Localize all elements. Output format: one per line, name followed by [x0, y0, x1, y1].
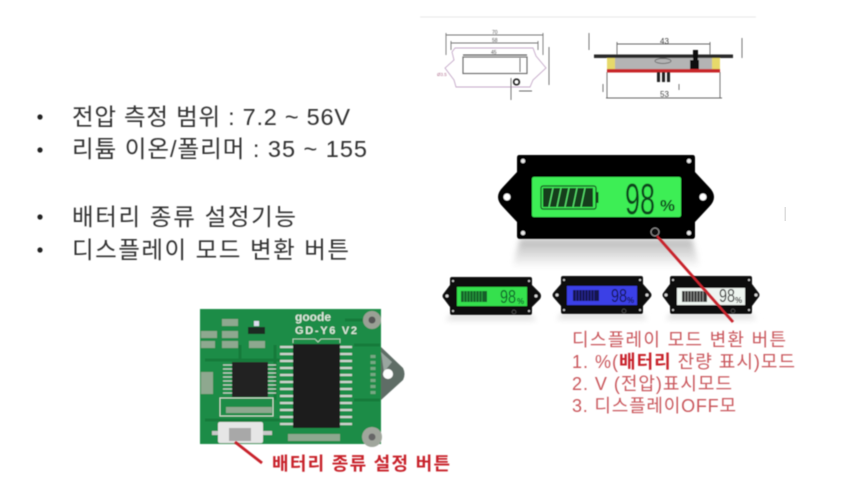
callout: display mode description	[572, 330, 795, 416]
small display: blue	[552, 276, 652, 321]
battery icon	[541, 186, 598, 209]
small display: green: %	[517, 297, 524, 306]
metal tab	[381, 347, 404, 400]
small chip	[223, 362, 276, 397]
small display: white: %	[735, 296, 742, 305]
bullet item: battery type setting: 배터리 종류 설정기능	[72, 204, 296, 230]
circuit board photo	[200, 309, 404, 447]
display reflection	[512, 239, 700, 268]
screws	[363, 311, 381, 329]
green LCD	[532, 177, 681, 217]
arrow: setting button line	[235, 442, 262, 463]
dimension drawings	[420, 17, 756, 100]
mode button	[651, 228, 659, 236]
small display: white: 98	[719, 286, 735, 306]
mode 3: 3. 디스플레이OFF모	[572, 396, 736, 416]
bullet item: display mode button: 디스플레이 모드 변환 버튼	[72, 237, 349, 263]
drawing: side view: 43	[660, 37, 669, 46]
label: battery type setting button: 배터리 종류 설정 버튼	[272, 454, 450, 474]
bullet item: voltage range: 전압 측정 범위 : 7.2 ~ 56V	[72, 104, 350, 130]
small display: blue: %	[627, 296, 634, 305]
mode 1: 1. %(배터리 잔량 표시)모드	[572, 352, 795, 372]
PCB labels: goode	[295, 310, 331, 324]
drawing: front view: 45	[491, 50, 497, 56]
main battery display	[498, 155, 714, 268]
drawing: front view: 58	[492, 38, 498, 44]
drawing: side view: 53	[660, 90, 669, 99]
arrow: display mode button line	[657, 236, 733, 322]
small components	[201, 319, 340, 441]
drawing: front view: Ø3.5	[437, 72, 447, 77]
reading 98%: 98	[625, 175, 655, 224]
main battery display: %	[660, 198, 675, 215]
small display: green: 98	[500, 287, 516, 307]
faint edge mark	[784, 207, 786, 221]
mounting holes	[504, 159, 706, 235]
mode 2: 2. V (전압)표시모드	[572, 374, 732, 394]
large chip	[280, 339, 352, 428]
setting button	[212, 422, 272, 443]
drawing: front view	[437, 30, 549, 100]
bullet list: specifications	[37, 104, 367, 263]
PCB traces	[205, 320, 380, 420]
small display: white	[662, 276, 760, 321]
drawing: side view	[589, 33, 742, 99]
bullet item: lithium range: 리튬 이온/폴리머 : 35 ~ 155	[72, 136, 367, 162]
circuit board photo: GD-Y6 V2	[295, 325, 357, 337]
small display: green	[442, 277, 541, 322]
small display: blue: 98	[611, 286, 627, 306]
display body	[498, 155, 714, 239]
drawing: front view: 70	[492, 30, 498, 36]
callout heading: 디스플레이 모드 변환 버튼	[572, 330, 786, 350]
green PCB	[200, 309, 381, 444]
